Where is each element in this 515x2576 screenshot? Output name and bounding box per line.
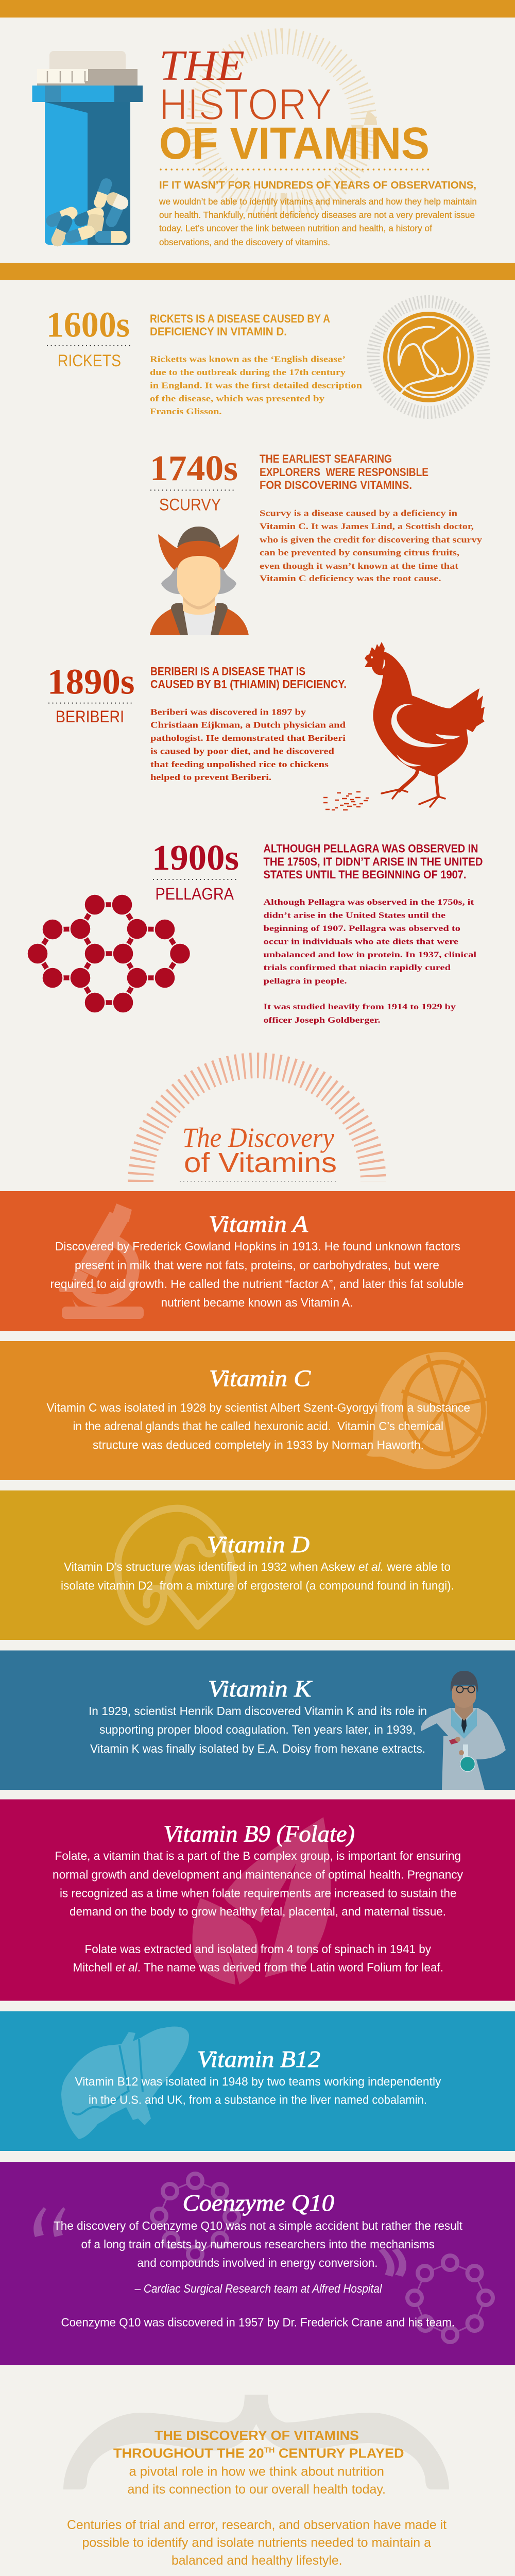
body text: Folate was extracted and isolated from 4 tons of spinach in 1941 by [84, 1942, 431, 1956]
body text: – Cardiac Surgical Research team at Alfred Hospital [134, 2282, 382, 2295]
body text: pellagra in people. [264, 977, 347, 986]
body text: of the disease, which was presented by [150, 394, 325, 403]
heading: EXPLORERS WERE RESPONSIBLE [260, 466, 428, 479]
icon: opening quote mark [33, 2207, 65, 2237]
heading: THE DISCOVERY OF VITAMINS [154, 2428, 359, 2443]
heading: Vitamin D [207, 1531, 310, 1557]
panel: Vitamin K [0, 1651, 515, 1790]
body text: and compounds involved in energy conversion. [137, 2256, 378, 2269]
heading: Coenzyme Q10 [182, 2190, 334, 2216]
body text: Mitchell et al. The name was derived from the Latin word Folium for leaf. [73, 1961, 443, 1974]
body text: Scurvy is a disease caused by a deficiency in [260, 508, 457, 518]
intro text [159, 179, 477, 247]
body text: due to the outbreak during the 17th century [150, 367, 346, 377]
body text: in the adrenal glands that he called hexuronic acid. Vitamin C’s chemical [73, 1419, 443, 1433]
intro text: observations, and the discovery of vitamins. [159, 237, 330, 247]
intro text: we wouldn’t be able to identify vitamins and minerals and how they help maintain [159, 196, 477, 207]
heading: BERIBERI IS A DISEASE THAT IS [150, 665, 305, 678]
icon: pill bottle [32, 51, 143, 248]
header panel [32, 41, 477, 248]
heading: FOR DISCOVERING VITAMINS. [260, 479, 412, 492]
body text [53, 1849, 463, 1974]
body text [150, 707, 346, 782]
body text [50, 1240, 464, 1309]
heading [260, 452, 428, 492]
heading: the discovery of vitamins: The Discovery [182, 1122, 334, 1153]
heading: Vitamin B12 [197, 2046, 320, 2072]
heading: Vitamin B9 (Folate) [164, 1821, 355, 1846]
title: THE [159, 42, 245, 90]
body text: that feeding unpolished rice to chickens [150, 759, 329, 769]
rice grains [323, 792, 369, 810]
body text [67, 2465, 447, 2568]
body text: normal growth and development and maintenance of optimal health. Pregnancy [53, 1868, 463, 1882]
body text: supporting proper blood coagulation. Ten years later, in 1939, [99, 1723, 416, 1736]
icon: bone badge [373, 302, 484, 412]
heading: DEFICIENCY IN VITAMIN D. [150, 325, 287, 338]
panel: Vitamin D [0, 1490, 515, 1640]
intro text: IF IT WASN’T FOR HUNDREDS OF YEARS OF OBSERVATIONS, [159, 179, 476, 191]
panel: Coenzyme Q10 [0, 2162, 515, 2365]
body text: isolate vitamin D2 from a mixture of ergosterol (a compound found in fungi). [61, 1579, 454, 1592]
body text: even though it wasn’t known at the time that [260, 561, 459, 571]
body text: Centuries of trial and error, research, and observation have made it [67, 2518, 447, 2532]
body text: can be prevented by consuming citrus fruits, [260, 548, 459, 557]
heading: STATES UNTIL THE BEGINNING OF 1907. [264, 868, 467, 881]
icon: lungs silhouette [63, 2395, 449, 2489]
title: OF VITAMINS [159, 118, 430, 168]
intro text: today. Let’s uncover the link between nutrition and health, a history of [159, 223, 432, 233]
body text: nutrient became known as Vitamin A. [161, 1296, 353, 1309]
heading: CAUSED BY B1 (THIAMIN) DEFICIENCY. [150, 678, 347, 690]
body text: demand on the body to grow healthy fetal, placental, and maternal tissue. [70, 1905, 446, 1918]
heading: CENTURY PLAYED [274, 2445, 404, 2461]
body text: Vitamin K was finally isolated by E.A. Doisy from hexane extracts. [90, 1742, 425, 1755]
body text: It was studied heavily from 1914 to 1929 by [264, 1003, 456, 1011]
body text: trials confirmed that niacin rapidly cured [264, 963, 451, 972]
heading: Vitamin A [209, 1211, 308, 1237]
body text [75, 2075, 441, 2106]
heading [264, 842, 483, 881]
body text: Francis Glisson. [150, 406, 221, 416]
title [159, 42, 430, 168]
body text: helped to prevent Beriberi. [150, 772, 271, 782]
body text [260, 508, 483, 583]
body text: Folate, a vitamin that is a part of the B complex group, is important for ensuring [55, 1849, 461, 1862]
body text: is caused by poor diet, and he discovered [150, 746, 334, 756]
body text: Vitamin D’s structure was identified in 1932 when Askew et al. were able to [64, 1560, 451, 1573]
icon: ring chain 1 [152, 2174, 239, 2261]
panel: conclusion [63, 2395, 449, 2568]
heading: ALTHOUGH PELLAGRA WAS OBSERVED IN [264, 842, 478, 855]
icon: niacin molecule [27, 894, 191, 1013]
panel: Vitamin C [0, 1341, 515, 1480]
body text: Vitamin C was isolated in 1928 by scientist Albert Szent-Gyorgyi from a substance [46, 1401, 470, 1414]
body text: In 1929, scientist Henrik Dam discovered Vitamin K and its role in [89, 1704, 427, 1718]
body text: of a long train of tests by numerous researchers into the mechanisms [81, 2238, 435, 2251]
top band [0, 0, 515, 18]
body text: beginning of 1907. Pellagra was observed to [264, 924, 460, 933]
body text: in the U.S. and UK, from a substance in the liver named cobalamin. [89, 2093, 427, 2106]
body text: Discovered by Frederick Gowland Hopkins in 1913. He found unknown factors [55, 1240, 460, 1253]
body text: and its connection to our overall health today. [128, 2482, 386, 2497]
icon: lemon [366, 1352, 492, 1469]
sunburst [199, 41, 364, 206]
icon: microscope [59, 1204, 144, 1319]
heading: the discovery of vitamins: of Vitamins [184, 1147, 337, 1178]
body text: Vitamin C deficiency was the root cause. [260, 573, 441, 583]
body text: required to aid growth. He called the nutrient “factor A”, and later this fat soluble [50, 1277, 464, 1291]
disease name: PELLAGRA [156, 885, 234, 903]
body text [54, 2219, 463, 2329]
icon: scientist [421, 1671, 506, 1790]
panel: Vitamin B12 [0, 2011, 515, 2151]
icon: explorer portrait [150, 527, 249, 635]
body text: possible to identify and isolate nutrients needed to maintain a [82, 2536, 431, 2550]
body text: Although Pellagra was observed in the 1750s, it [264, 898, 474, 907]
intro text: our health. Thankfully, nutrient deficiency diseases are not a very prevalent issue [159, 210, 475, 220]
header bottom band [0, 263, 515, 280]
body text: unbalanced and low in protein. In 1937, clinical [264, 951, 477, 959]
panel: Vitamin A [0, 1191, 515, 1331]
icon: liver [61, 2027, 189, 2139]
body text [61, 1560, 454, 1592]
heading [113, 2428, 404, 2461]
body text: balanced and healthy lifestyle. [171, 2553, 342, 2568]
body text: didn’t arise in the United States until the [264, 911, 445, 920]
body text: Vitamin C. It was James Lind, a Scottish doctor, [260, 521, 474, 531]
arc of rays [141, 1065, 373, 1182]
heading: THE 1750S, IT DIDN’T ARISE IN THE UNITED [264, 855, 483, 868]
body text [264, 898, 477, 1025]
panel: Vitamin B9 [0, 1799, 515, 2001]
body text: a pivotal role in how we think about nutrition [129, 2465, 384, 2479]
body text: Beriberi was discovered in 1897 by [150, 707, 306, 717]
disease name: BERIBERI [56, 707, 124, 726]
body text: Coenzyme Q10 was discovered in 1957 by Dr. Frederick Crane and his team. [61, 2315, 455, 2329]
icon: fungus outline [118, 1509, 233, 1626]
year: 1600s [46, 305, 130, 345]
panel: 1890s beriberi [47, 642, 485, 810]
body text [89, 1704, 427, 1755]
body text [46, 1401, 470, 1452]
panel: 1600s rickets [46, 302, 484, 416]
heading: TH [264, 2446, 274, 2454]
body text: is recognized as a time when folate requirements are increased to sustain the [60, 1887, 456, 1900]
body text [150, 354, 362, 416]
body text: officer Joseph Goldberger. [264, 1016, 380, 1025]
heading: the discovery of vitamins [141, 1065, 373, 1182]
icon: ring chain 2 [407, 2256, 493, 2342]
heading [150, 312, 330, 338]
body text: Christiaan Eijkman, a Dutch physician and [150, 720, 346, 730]
heading [150, 665, 347, 690]
heading: Vitamin C [209, 1365, 311, 1391]
body text: present in milk that were not fats, proteins, or carbohydrates, but were [75, 1258, 439, 1272]
body text: The discovery of Coenzyme Q10 was not a simple accident but rather the result [54, 2219, 463, 2232]
body text: pathologist. He demonstrated that Beriberi [150, 733, 346, 743]
body text: who is given the credit for discovering that scurvy [260, 535, 483, 545]
year: 1900s [152, 838, 239, 878]
year: 1890s [47, 663, 135, 702]
panel: 1900s pellagra [27, 838, 483, 1025]
body text: Ricketts was known as the ‘English disease’ [150, 354, 346, 364]
heading: Vitamin K [208, 1675, 313, 1702]
icon: hen [323, 642, 485, 810]
title: HISTORY [159, 80, 332, 129]
body text: structure was deduced completely in 1933 by Norman Haworth. [93, 1438, 424, 1452]
panel: 1740s scurvy [150, 449, 483, 635]
heading: THROUGHOUT THE 20 [113, 2445, 259, 2461]
icon: leaves [193, 1817, 331, 1985]
body text: Vitamin B12 was isolated in 1948 by two teams working independently [75, 2075, 441, 2088]
disease name: RICKETS [58, 351, 121, 370]
body text: occur in individuals who ate diets that were [264, 938, 458, 946]
disease name: SCURVY [159, 496, 221, 514]
heading: THE EARLIEST SEAFARING [260, 452, 392, 465]
icon: closing quote mark [379, 2248, 406, 2277]
body text: in England. It was the first detailed description [150, 380, 362, 391]
heading: RICKETS IS A DISEASE CAUSED BY A [150, 312, 330, 325]
year: 1740s [150, 449, 238, 488]
